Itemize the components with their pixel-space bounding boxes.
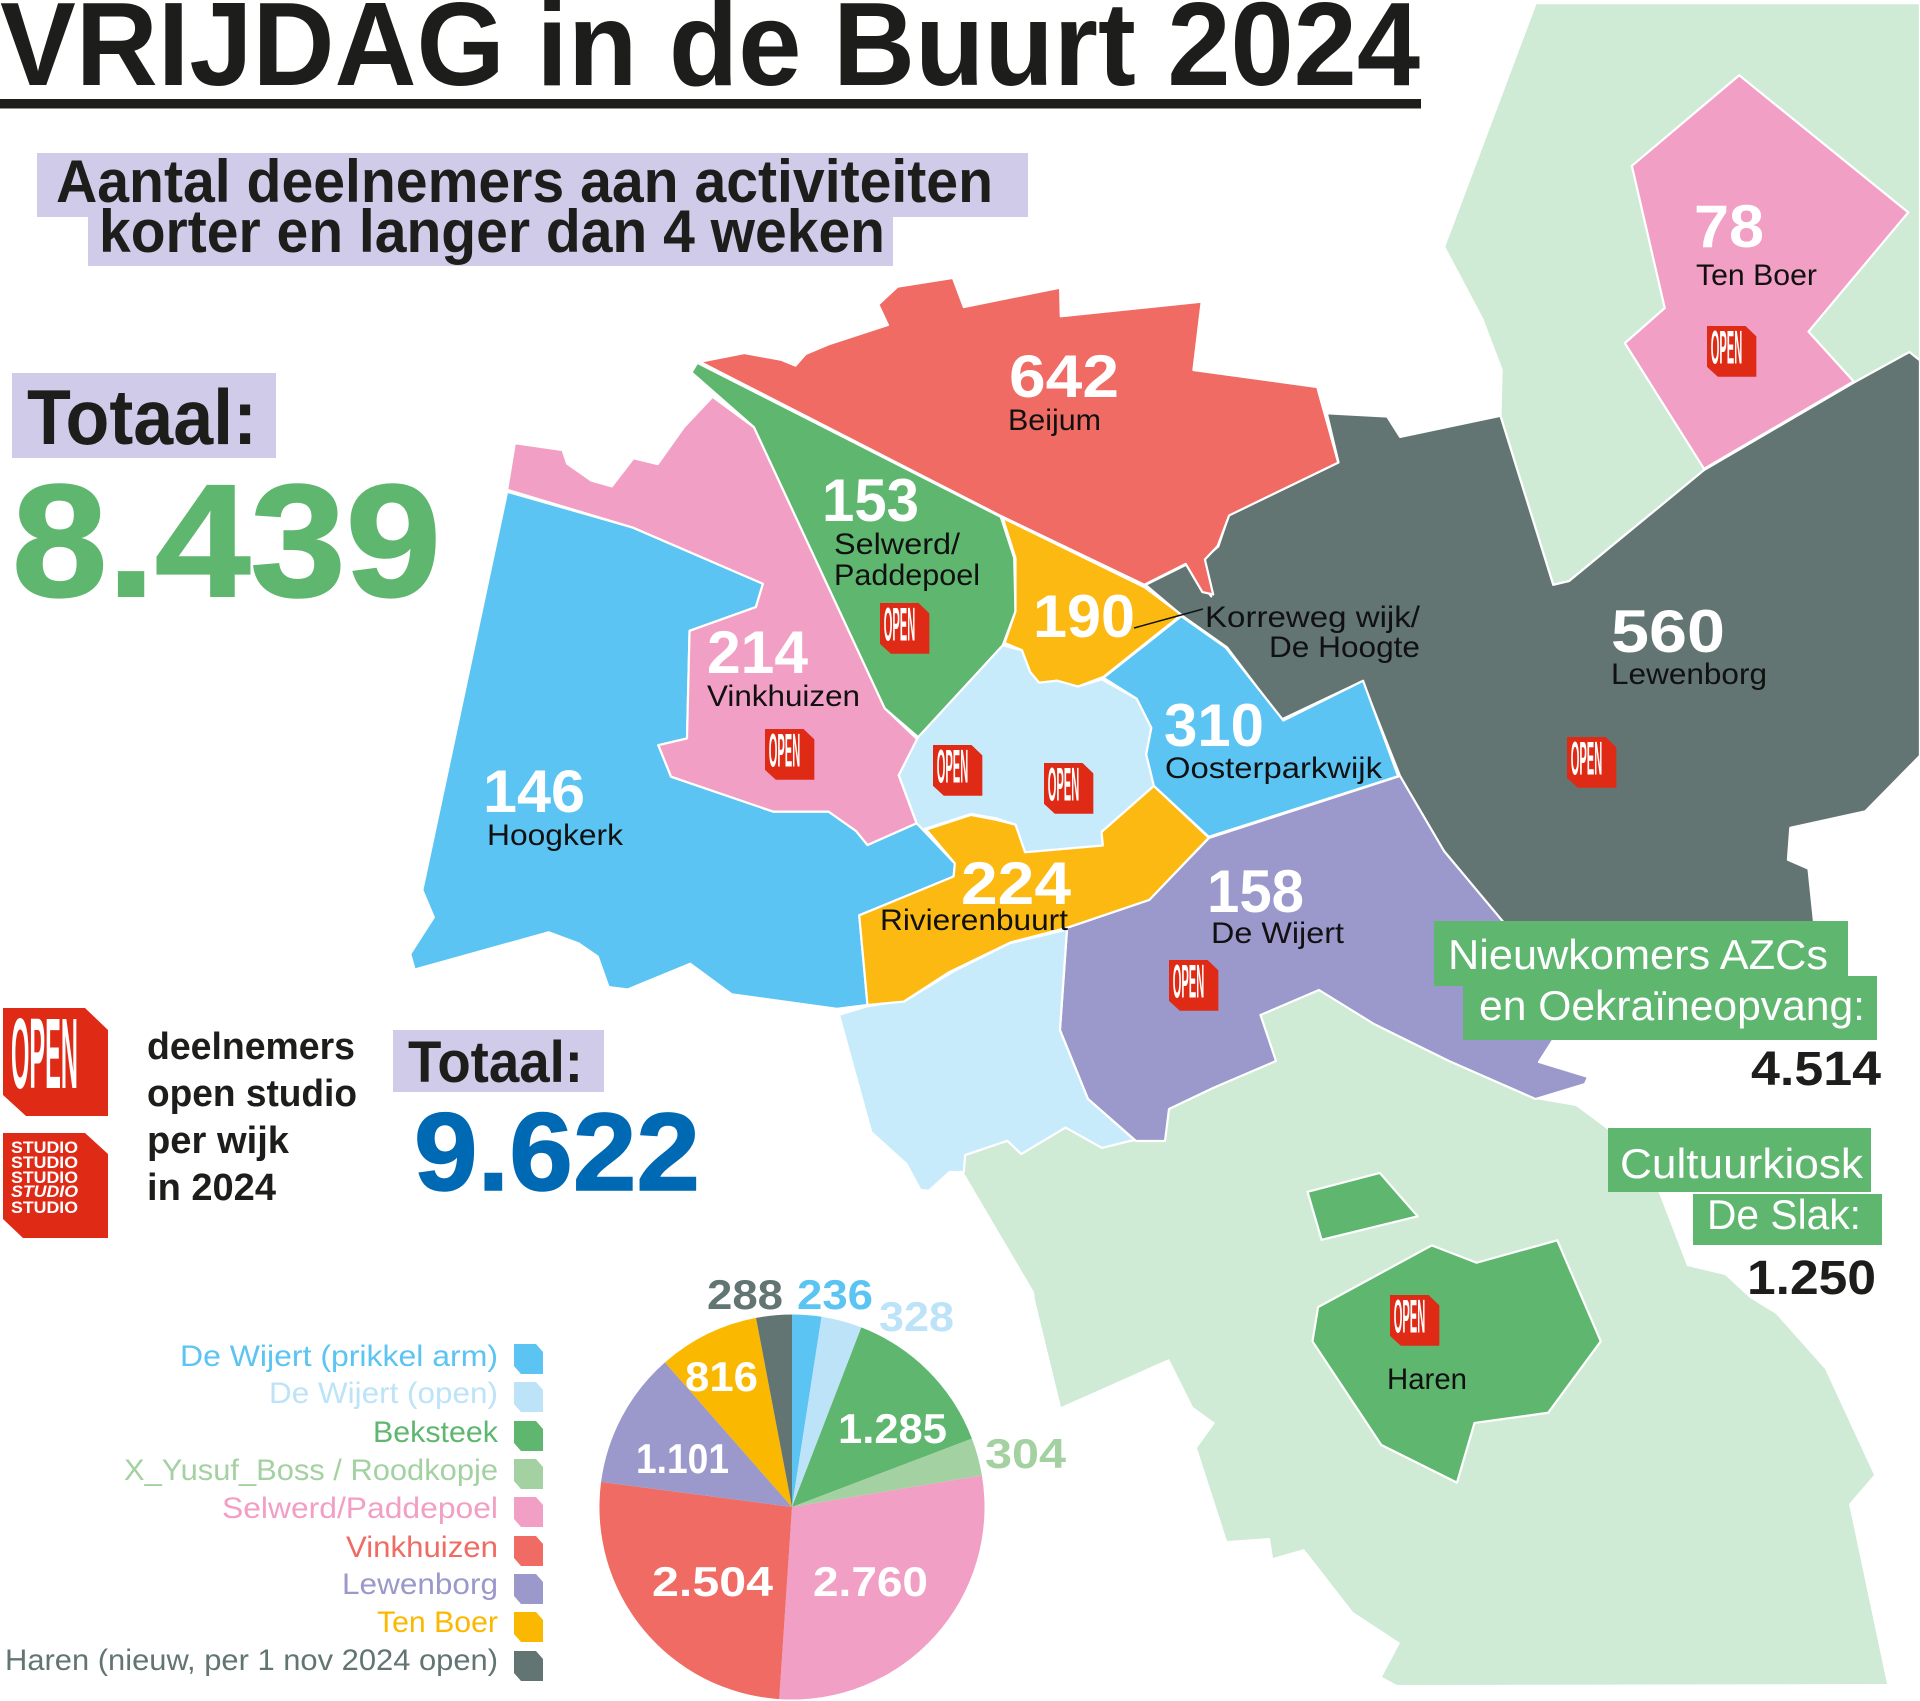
label: Beijum — [1008, 343, 1119, 437]
total activities: Totaal: — [27, 373, 257, 461]
icon: open Lewenborg — [1567, 732, 1616, 788]
label: Haren: Haren — [1387, 1363, 1467, 1396]
pie chart values: 236 — [797, 1271, 873, 1318]
region: Oosterparkwijk — [1103, 616, 1398, 837]
region: south surrounding area — [964, 990, 1887, 1685]
label: Ten Boer: Ten Boer — [1696, 259, 1817, 292]
label: Hoogkerk: Hoogkerk — [487, 819, 624, 852]
label: Korreweg wijk/De Hoogte: De Hoogte — [1269, 631, 1420, 664]
pie chart values: 304 — [985, 1430, 1067, 1477]
label: Lewenborg: 560 — [1611, 598, 1725, 665]
region: De Wijert south — [839, 930, 1134, 1191]
region: Korreweg wijk/De Hoogte — [1003, 518, 1181, 687]
legend item: Vinkhuizen — [346, 1531, 543, 1566]
label: Oosterparkwijk: Oosterparkwijk — [1165, 752, 1383, 785]
subtitle: korter en langer dan 4 weken — [99, 198, 885, 265]
total activities: 8.439 — [12, 451, 441, 630]
label: Selwerd/Paddepoel: Selwerd/ — [834, 528, 961, 561]
icon: open Centrum east — [1044, 758, 1093, 814]
icon: open Vinkhuizen — [765, 724, 814, 780]
region: Centrum — [899, 645, 1154, 852]
total open studio — [393, 1030, 700, 1214]
region: Haren north — [1308, 1173, 1418, 1240]
region: Beijum — [700, 278, 1338, 594]
icon: open Haren — [1390, 1290, 1439, 1346]
icon: studio legend: STUDIO — [11, 1198, 78, 1217]
region: Lewenborg — [1146, 352, 1920, 925]
pie chart values: 1.101 — [636, 1435, 729, 1482]
text: OPEN — [1571, 732, 1602, 785]
callout: Nieuwkomers: Nieuwkomers AZCs — [1448, 931, 1828, 978]
legend item: De Wijert (prikkel arm): De Wijert (prikkel arm) — [180, 1340, 498, 1373]
legend item: Beksteek — [373, 1416, 543, 1451]
legend item: De Wijert (open): De Wijert (open) — [269, 1377, 498, 1410]
legend item: Selwerd/Paddepoel: Selwerd/Paddepoel — [222, 1492, 498, 1525]
icon: studio legend: STUDIO — [11, 1138, 78, 1157]
text: OPEN — [884, 598, 915, 651]
label: Lewenborg: Lewenborg — [1611, 658, 1767, 691]
label: Oosterparkwijk — [1164, 692, 1383, 785]
callout: Cultuurkiosk: Cultuurkiosk — [1620, 1140, 1864, 1187]
legend item: Lewenborg — [342, 1568, 543, 1604]
label: Selwerd/Paddepoel — [822, 467, 980, 592]
label: Korreweg wijk/De Hoogte: Korreweg wijk/ — [1205, 601, 1421, 634]
label: Selwerd/Paddepoel: 153 — [822, 467, 919, 534]
icon: open De Wijert — [1169, 955, 1218, 1011]
label: Ten Boer — [1694, 193, 1817, 292]
region: north surrounding area — [1444, 3, 1920, 585]
legend item: Ten Boer: Ten Boer — [377, 1606, 498, 1639]
label: Rivierenbuurt — [880, 850, 1072, 937]
label: Ten Boer: 78 — [1694, 193, 1764, 260]
icon: studio legend: STUDIO — [11, 1153, 78, 1172]
label: Selwerd/Paddepoel: Paddepoel — [834, 559, 980, 592]
label: Oosterparkwijk: 310 — [1164, 692, 1264, 759]
region: Hoogkerk — [410, 492, 955, 1009]
text: OPEN — [937, 740, 968, 793]
subtitle: Aantal deelnemers aan activiteiten — [56, 148, 993, 215]
pie chart values: 288 — [707, 1271, 783, 1318]
icon: studio legend — [3, 1133, 108, 1238]
icon: open Centrum west — [933, 740, 982, 796]
callout: Cultuurkiosk: De Slak: — [1707, 1191, 1861, 1238]
label: Beijum: Beijum — [1008, 404, 1101, 437]
region: Rivierenbuurt — [859, 786, 1209, 1005]
text: OPEN — [1394, 1290, 1425, 1343]
label: Vinkhuizen — [707, 619, 860, 713]
total activities — [12, 373, 441, 630]
callout: Nieuwkomers — [1434, 921, 1881, 1096]
text: deelnemers open studio per wijk — [147, 1026, 357, 1209]
icon: studio legend: STUDIO — [11, 1182, 78, 1201]
label: Korreweg wijk/De Hoogte — [1134, 601, 1421, 664]
callout: Cultuurkiosk: 1.250 — [1747, 1252, 1876, 1305]
icon: open legend — [3, 998, 108, 1116]
icon: studio legend: STUDIO — [11, 1168, 78, 1187]
text: deelnemers open studio per wijk: in 2024 — [147, 1167, 276, 1209]
icon: open Ten Boer — [1707, 321, 1756, 377]
map labels — [483, 193, 1817, 1396]
region: Haren — [1312, 1240, 1601, 1483]
label: Rivierenbuurt: 224 — [961, 850, 1072, 917]
subtitle — [37, 148, 1028, 266]
callout: Nieuwkomers: 4.514 — [1751, 1043, 1881, 1096]
region: Ten Boer — [1625, 75, 1908, 469]
pie chart — [599, 1314, 985, 1700]
pie chart legend — [5, 1340, 543, 1681]
legend item: Lewenborg: Lewenborg — [342, 1568, 498, 1601]
text: OPEN — [1048, 758, 1079, 811]
text: OPEN — [11, 998, 78, 1110]
pie chart values: 2.504 — [652, 1558, 774, 1605]
legend item: Vinkhuizen: Vinkhuizen — [346, 1531, 498, 1564]
pie chart values: 2.760 — [813, 1558, 928, 1605]
text: OPEN — [1173, 955, 1204, 1008]
map: wijken of Groningen — [410, 3, 1920, 1685]
pie chart values: 328 — [879, 1293, 954, 1340]
label: De Wijert — [1207, 858, 1345, 950]
text: deelnemers open studio per wijk: deelnemers — [147, 1026, 355, 1068]
label: Lewenborg — [1611, 598, 1767, 691]
label: Vinkhuizen: 214 — [707, 619, 809, 686]
callout: Nieuwkomers: en Oekraïneopvang: — [1479, 982, 1865, 1029]
legend item: Beksteek: Beksteek — [373, 1416, 499, 1449]
label: Beijum: 642 — [1009, 343, 1119, 410]
pie chart values: 1.285 — [838, 1405, 947, 1452]
legend item: Haren: Haren (nieuw, per 1 nov 2024 open) — [5, 1644, 498, 1677]
callout: Cultuurkiosk — [1608, 1128, 1882, 1305]
region: De Wijert — [1060, 776, 1588, 1141]
label: Vinkhuizen: Vinkhuizen — [707, 680, 860, 713]
legend item: X_Yusuf_Boss / Roodkopje: X_Yusuf_Boss / Roodkopje — [124, 1454, 498, 1487]
text: OPEN — [1711, 321, 1742, 374]
total open studio: Totaal: — [408, 1030, 583, 1095]
text: OPEN — [769, 724, 800, 777]
legend item: Ten Boer — [377, 1606, 543, 1642]
label: Korreweg wijk value: 190 — [1033, 583, 1135, 650]
label: Hoogkerk — [483, 758, 624, 852]
region: Vinkhuizen — [507, 397, 918, 845]
label: De Wijert: 158 — [1207, 858, 1304, 925]
label: Rivierenbuurt: Rivierenbuurt — [880, 904, 1069, 937]
text: deelnemers open studio per wijk: per wijk — [147, 1120, 290, 1162]
label: De Wijert: De Wijert — [1211, 917, 1345, 950]
text: deelnemers open studio per wijk: open studio — [147, 1073, 357, 1115]
pie chart values — [636, 1271, 1067, 1605]
icon: open Selwerd — [880, 598, 929, 654]
label: Hoogkerk: 146 — [483, 758, 585, 825]
total open studio: 9.622 — [414, 1091, 700, 1214]
pie chart values: 816 — [685, 1353, 758, 1400]
region: Selwerd/Paddepoel — [691, 363, 1015, 737]
